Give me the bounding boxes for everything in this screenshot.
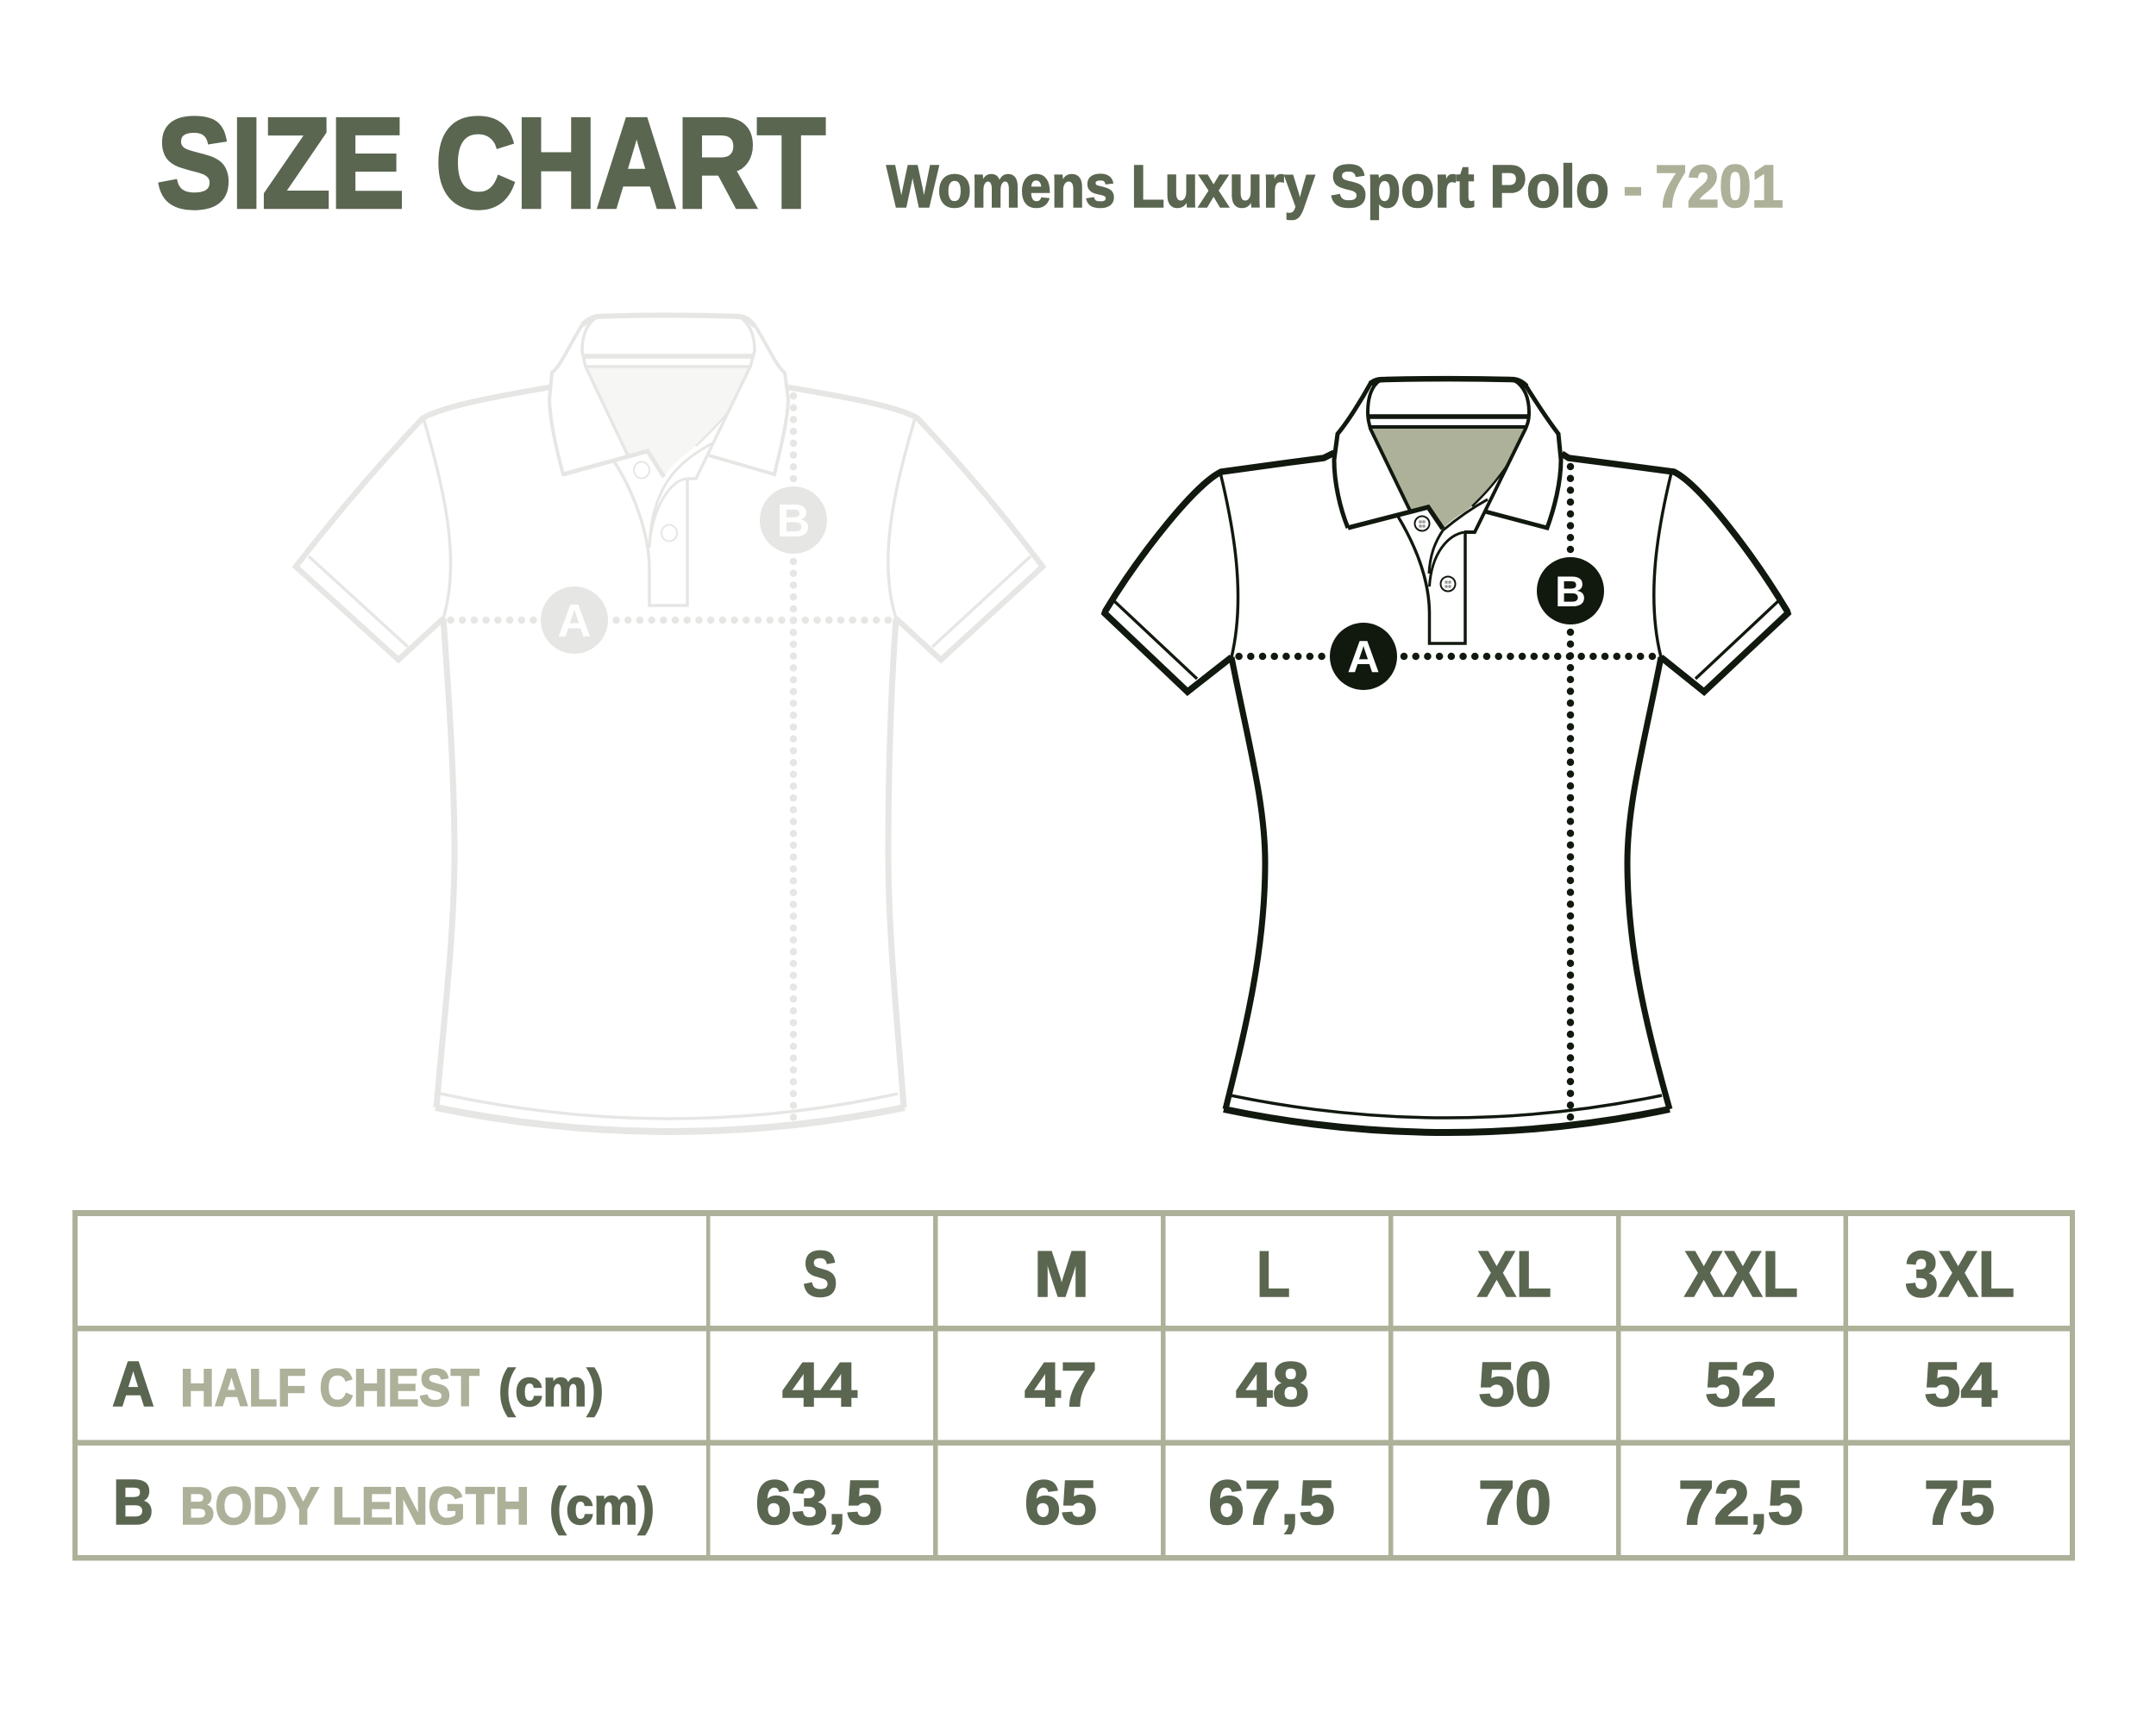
subtitle: 7201 xyxy=(1655,153,1783,220)
header row: sizes: XL xyxy=(1477,1238,1551,1310)
dotted length line xyxy=(1567,467,1574,1119)
faded collar flap xyxy=(563,451,664,477)
collar xyxy=(1370,379,1526,386)
header row: sizes: M xyxy=(1034,1238,1089,1310)
row B: body length xyxy=(113,1466,1995,1538)
placket xyxy=(1397,515,1465,643)
faded body sides xyxy=(436,618,454,1107)
row A: half chest: HALF CHEST xyxy=(180,1358,479,1417)
row A: half chest: 48 xyxy=(1236,1351,1309,1420)
shoulders and sleeves xyxy=(1105,453,1334,692)
row B: body length: BODY LENGTH xyxy=(180,1477,530,1535)
header row: sizes: XXL xyxy=(1684,1238,1798,1310)
faded marker B: B xyxy=(776,495,811,547)
marker A: A xyxy=(1347,632,1380,682)
table grid xyxy=(72,1210,2075,1561)
marker A xyxy=(1330,623,1397,690)
header row: sizes: L xyxy=(1257,1238,1290,1310)
row A: half chest: (cm) xyxy=(498,1359,604,1417)
title: SIZE CHART xyxy=(157,92,825,235)
header row: sizes xyxy=(803,1238,2015,1310)
row B: body length: 65 xyxy=(1025,1469,1097,1538)
buttons xyxy=(1414,516,1430,531)
hem xyxy=(1224,1109,1670,1132)
row B: body length: 63,5 xyxy=(755,1469,882,1538)
sleeve seams xyxy=(1220,473,1238,657)
dotted chest line xyxy=(1239,653,1654,660)
row B: body length: B xyxy=(113,1466,154,1538)
faded marker A: A xyxy=(557,595,592,647)
size table xyxy=(72,1210,2075,1561)
main polo illustration xyxy=(1105,379,1788,1132)
row A: half chest: 54 xyxy=(1924,1351,1997,1420)
row B: body length: 67,5 xyxy=(1208,1469,1335,1538)
faded collar xyxy=(582,316,755,326)
header row: sizes: 3XL xyxy=(1905,1238,2015,1310)
row A: half chest: 50 xyxy=(1478,1351,1551,1420)
faded buttons xyxy=(634,462,649,478)
inner neck fill xyxy=(1369,427,1526,529)
faded dotted chest line xyxy=(450,617,889,624)
faded placket xyxy=(614,461,687,605)
row B: body length: 70 xyxy=(1478,1469,1551,1538)
body sides xyxy=(1225,657,1265,1109)
faded marker B xyxy=(760,486,827,554)
faded sleeve seams xyxy=(423,418,451,618)
faded polo illustration xyxy=(296,316,1043,1132)
subtitle: Womens Luxury Sport Polo xyxy=(887,153,1609,220)
header row: sizes: S xyxy=(803,1238,837,1310)
row B: body length: 75 xyxy=(1924,1469,1995,1538)
row B: body length: 72,5 xyxy=(1678,1469,1803,1538)
faded marker A xyxy=(541,586,608,654)
row A: half chest: 44 xyxy=(782,1351,857,1420)
marker B xyxy=(1537,557,1604,624)
faded neck stripes xyxy=(585,354,753,359)
faded shoulders and sleeves xyxy=(296,387,549,660)
subtitle: - xyxy=(1623,153,1643,220)
collar flap xyxy=(1348,507,1443,529)
row A: half chest: 47 xyxy=(1025,1351,1097,1420)
row A: half chest: A xyxy=(112,1348,154,1420)
faded placket inner fill xyxy=(587,367,750,477)
row B: body length: (cm) xyxy=(549,1477,655,1535)
faded hem xyxy=(436,1107,905,1132)
marker B: B xyxy=(1555,568,1586,616)
row A: half chest xyxy=(112,1348,1997,1420)
neck stripes xyxy=(1368,414,1529,419)
faded dotted length line xyxy=(790,396,797,1119)
row A: half chest: 52 xyxy=(1705,1351,1777,1420)
